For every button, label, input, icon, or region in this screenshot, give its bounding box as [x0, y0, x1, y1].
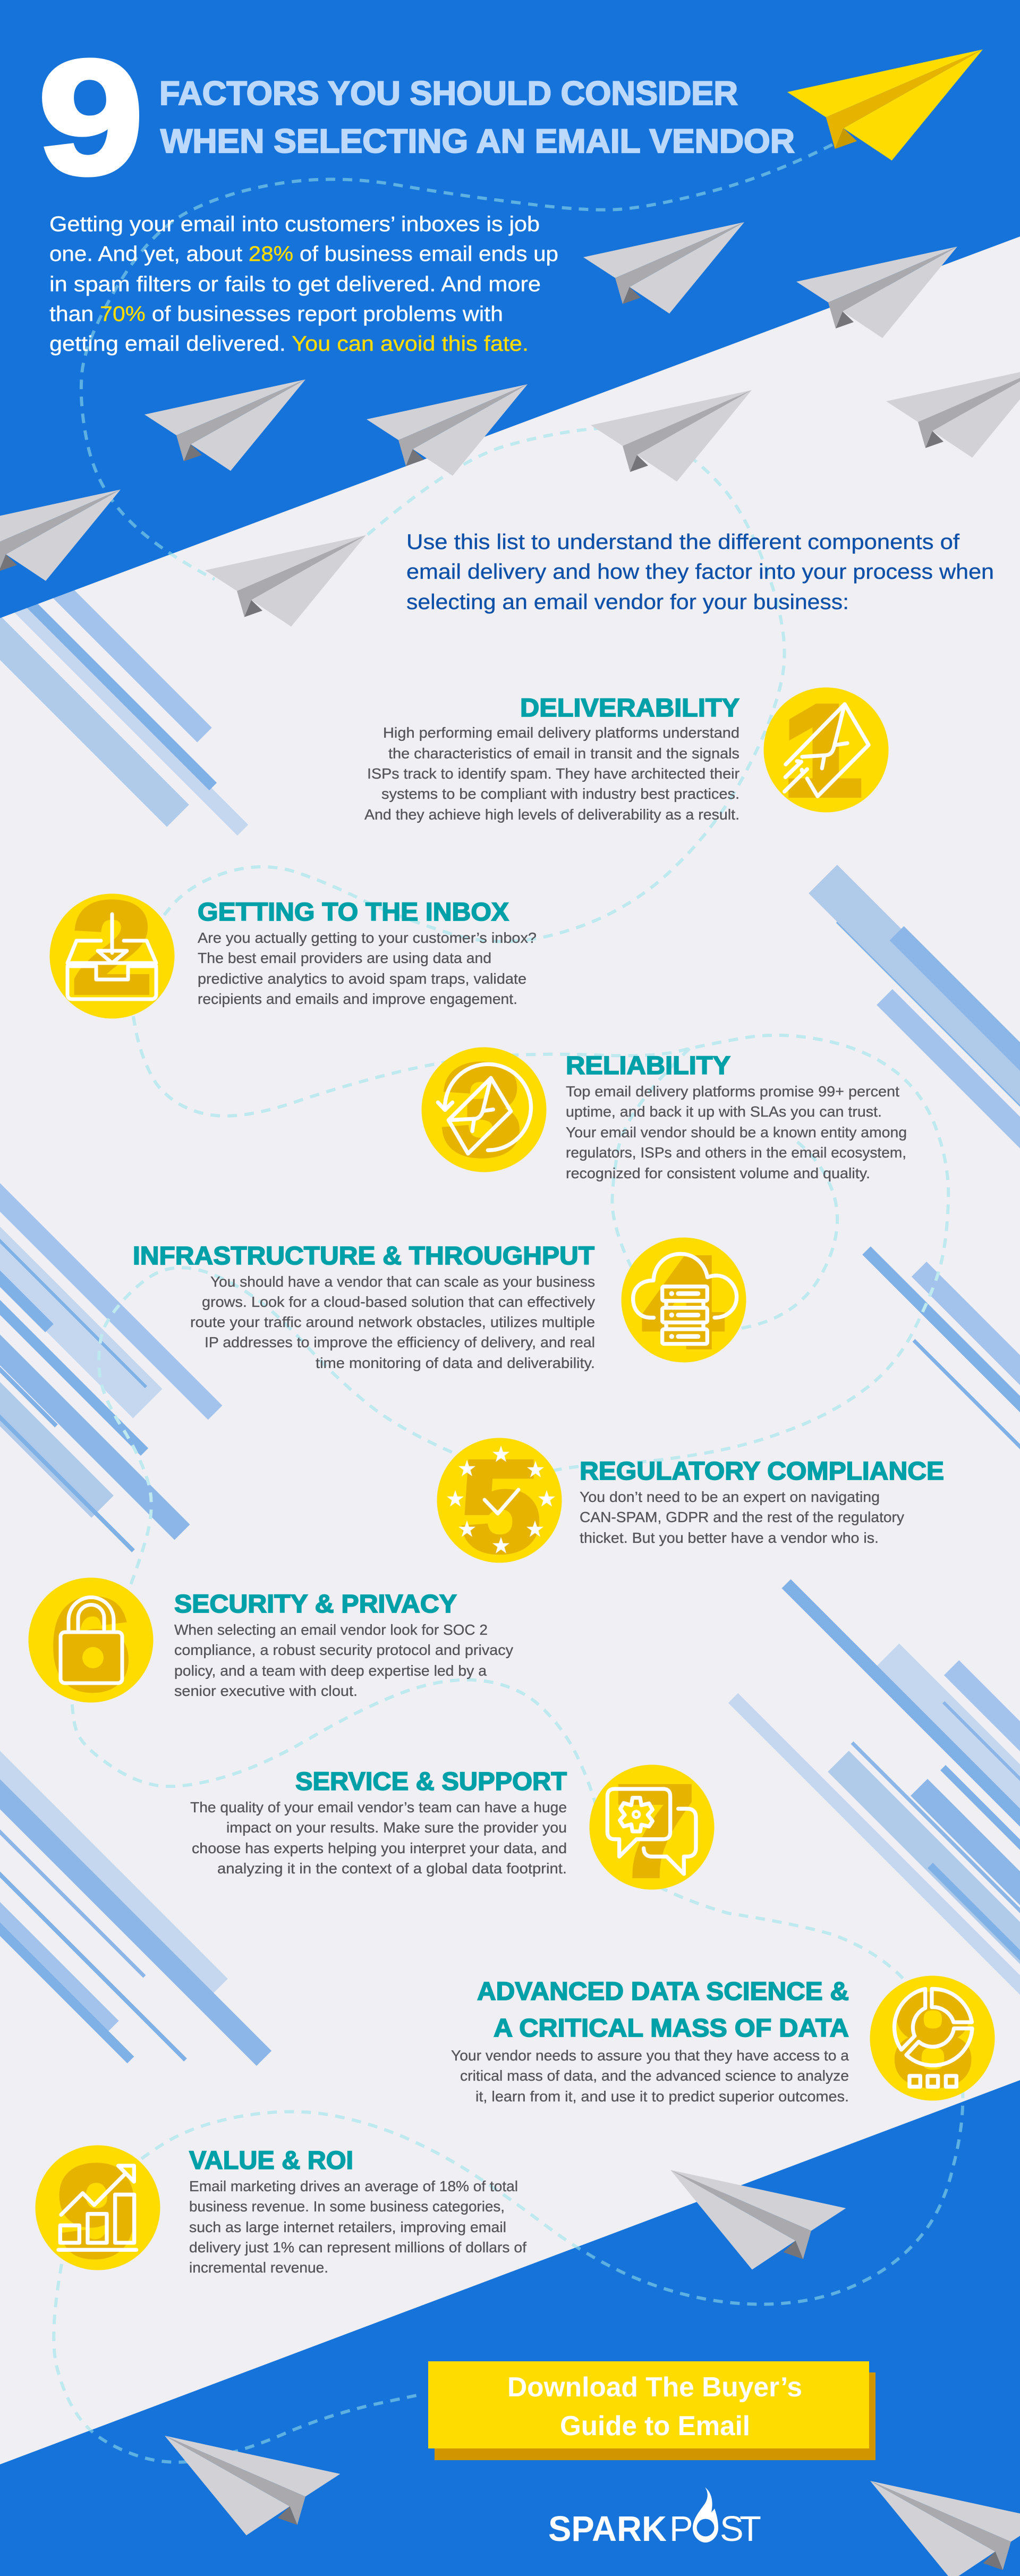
icon: envelope with return arrow: 3: [443, 1038, 521, 1181]
body text: such as large internet retailers, improving email: [189, 2219, 506, 2235]
body text: senior executive with clout.: [174, 1683, 358, 1699]
body text: route your traffic around network obstacles, utilizes multiple: [190, 1314, 595, 1330]
body text: business revenue. In some business categories,: [189, 2198, 505, 2215]
list introduction text block: [406, 530, 994, 614]
panel: infrastructure and throughput: [133, 1231, 746, 1373]
list introduction text block: Use this list to understand the different components of: [406, 530, 960, 554]
body text: recipients and emails and improve engagement.: [198, 991, 517, 1007]
heading: INFRASTRUCTURE & THROUGHPUT: [133, 1242, 594, 1270]
diagonal stripes: lower right: [733, 1584, 1020, 2397]
body text: [364, 724, 740, 823]
heading: ADVANCED DATA SCIENCE &: [477, 1978, 849, 2006]
panel: getting to the inbox: [50, 876, 537, 1019]
body text: the characteristics of email in transit and the signals: [388, 745, 740, 762]
body text: You don’t need to be an expert on navigating: [580, 1489, 880, 1505]
body text: predictive analytics to avoid spam traps, validate: [198, 970, 526, 987]
heading: A CRITICAL MASS OF DATA: [494, 2014, 849, 2042]
body text: When selecting an email vendor look for SOC 2: [174, 1621, 488, 1638]
icon: envelope with speed lines: [764, 679, 888, 822]
callout: download button: Guide to Email: [560, 2411, 750, 2442]
intro text block: one. And yet, about 28% of business email ends up: [49, 242, 558, 266]
body text: [189, 2178, 526, 2276]
diagonal stripes: upper right: [823, 879, 1020, 1528]
body text: [198, 930, 537, 1007]
heading: SERVICE & SUPPORT: [295, 1768, 567, 1796]
icon: speech bubbles with gear: [590, 1760, 714, 1902]
body text: incremental revenue.: [189, 2259, 328, 2276]
logo: SparkPost: [548, 2487, 761, 2549]
body text: Your vendor needs to assure you that they have access to a: [451, 2047, 849, 2064]
diagonal stripes: lower left: [0, 1445, 264, 2060]
diagonal stripes: upper left: [0, 204, 243, 830]
body text: policy, and a team with deep expertise led by a: [174, 1662, 487, 1679]
icon: ring of stars with checkmark: 5: [461, 1435, 540, 1577]
body text: thicket. But you better have a vendor who is.: [580, 1530, 879, 1546]
body text: choose has experts helping you interpret your data, and: [192, 1840, 567, 1856]
callout: download button: Download The Buyer’s: [507, 2372, 802, 2403]
body text: critical mass of data, and the advanced science to analyze: [460, 2067, 849, 2084]
panel: value and ROI: [35, 2140, 526, 2282]
intro text block: getting email delivered. You can avoid this fate.: [49, 332, 529, 356]
body text: compliance, a robust security protocol and privacy: [174, 1642, 513, 1658]
panel: service and support: [190, 1760, 714, 1902]
list introduction text block: email delivery and how they factor into your process when: [406, 560, 994, 584]
body text: Email marketing drives an average of 18% of total: [189, 2178, 518, 2194]
body text: [580, 1489, 904, 1546]
panel: deliverability: [364, 679, 888, 823]
body text: grows. Look for a cloud-based solution that can effectively: [202, 1294, 595, 1310]
body text: [566, 1083, 907, 1181]
body text: recognized for consistent volume and quality.: [566, 1165, 870, 1181]
icon: padlock: [29, 1573, 153, 1716]
bottom blue diagonal section: [0, 2080, 1020, 2576]
body text: Are you actually getting to your customer’s inbox?: [198, 930, 537, 946]
heading: [477, 1978, 849, 2042]
body text: CAN-SPAM, GDPR and the rest of the regulatory: [580, 1509, 904, 1525]
body text: systems to be compliant with industry best practices.: [381, 786, 740, 802]
panel: advanced data science: [451, 1969, 994, 2111]
body text: You should have a vendor that can scale as your business: [210, 1273, 595, 1290]
body text: uptime, and back it up with SLAs you can trust.: [566, 1103, 882, 1120]
icon: inbox tray: [50, 876, 174, 1019]
body text: ISPs track to identify spam. They have architected their: [367, 765, 740, 782]
title: FACTORS YOU SHOULD CONSIDER: [159, 75, 738, 112]
intro text block: [49, 213, 558, 356]
icon: cloud with servers: 4: [643, 1231, 722, 1373]
icon: ring of stars with checkmark: [437, 1435, 562, 1577]
panel: regulatory compliance: [437, 1435, 944, 1577]
body text: Your email vendor should be a known entity among: [566, 1124, 907, 1141]
icon: speech bubbles with gear: 7: [616, 1760, 694, 1902]
icon: envelope with speed lines: 1: [783, 679, 862, 822]
body text: IP addresses to improve the efficiency of delivery, and real: [205, 1334, 595, 1350]
logo: SparkPost: POST: [669, 2509, 761, 2549]
body text: Top email delivery platforms promise 99+ percent: [566, 1083, 899, 1100]
logo: SparkPost: SPARK: [548, 2509, 667, 2549]
heading: SECURITY & PRIVACY: [174, 1590, 457, 1618]
icon: rising bar chart: [35, 2140, 160, 2282]
body text: [451, 2047, 849, 2105]
icon: inbox tray: 2: [73, 876, 151, 1019]
body text: [174, 1621, 513, 1699]
heading: RELIABILITY: [566, 1052, 730, 1080]
body text: it, learn from it, and use it to predict superior outcomes.: [475, 2088, 849, 2105]
body text: delivery just 1% can represent millions of dollars of: [189, 2239, 526, 2256]
icon: yellow paper plane: [787, 49, 983, 161]
title: 9: [38, 27, 143, 208]
icon: donut chart with squares: 8: [894, 1969, 972, 2111]
body text: High performing email delivery platforms understand: [383, 724, 740, 741]
list introduction text block: selecting an email vendor for your business:: [406, 590, 849, 614]
body text: impact on your results. Make sure the provider you: [226, 1819, 567, 1836]
icon: cloud with servers: [622, 1231, 746, 1373]
icon: padlock: 6: [52, 1573, 130, 1716]
body text: [190, 1273, 595, 1371]
icon: donut chart with squares: [870, 1969, 994, 2111]
diagonal stripes: middle left: [0, 797, 215, 1551]
body text: And they achieve high levels of deliverability as a result.: [364, 806, 740, 823]
panel: reliability: [422, 1038, 907, 1181]
body text: The quality of your email vendor’s team can have a huge: [190, 1799, 567, 1815]
callout: download button: [428, 2361, 876, 2460]
body text: The best email providers are using data and: [198, 950, 491, 966]
heading: DELIVERABILITY: [520, 694, 740, 722]
body text: time monitoring of data and deliverability.: [316, 1355, 595, 1371]
title: WHEN SELECTING AN EMAIL VENDOR: [160, 123, 795, 160]
heading: GETTING TO THE INBOX: [198, 898, 509, 926]
intro text block: than 70% of businesses report problems with: [49, 302, 503, 326]
body text: [190, 1799, 567, 1877]
body text: regulators, ISPs and others in the email ecosystem,: [566, 1144, 906, 1161]
top blue diagonal section: [0, 0, 1020, 618]
title: [38, 27, 795, 208]
diagonal stripes: middle right: [866, 1251, 1020, 1872]
heading: REGULATORY COMPLIANCE: [580, 1457, 944, 1485]
icon: envelope with return arrow: [422, 1038, 546, 1181]
icon: rising bar chart: 9: [58, 2140, 137, 2282]
intro text block: Getting your email into customers’ inboxes is job: [49, 213, 540, 236]
panel: security and privacy: [29, 1573, 513, 1716]
body text: analyzing it in the context of a global data footprint.: [217, 1860, 567, 1877]
intro text block: in spam filters or fails to get delivered. And more: [49, 273, 541, 296]
heading: VALUE & ROI: [189, 2147, 353, 2175]
